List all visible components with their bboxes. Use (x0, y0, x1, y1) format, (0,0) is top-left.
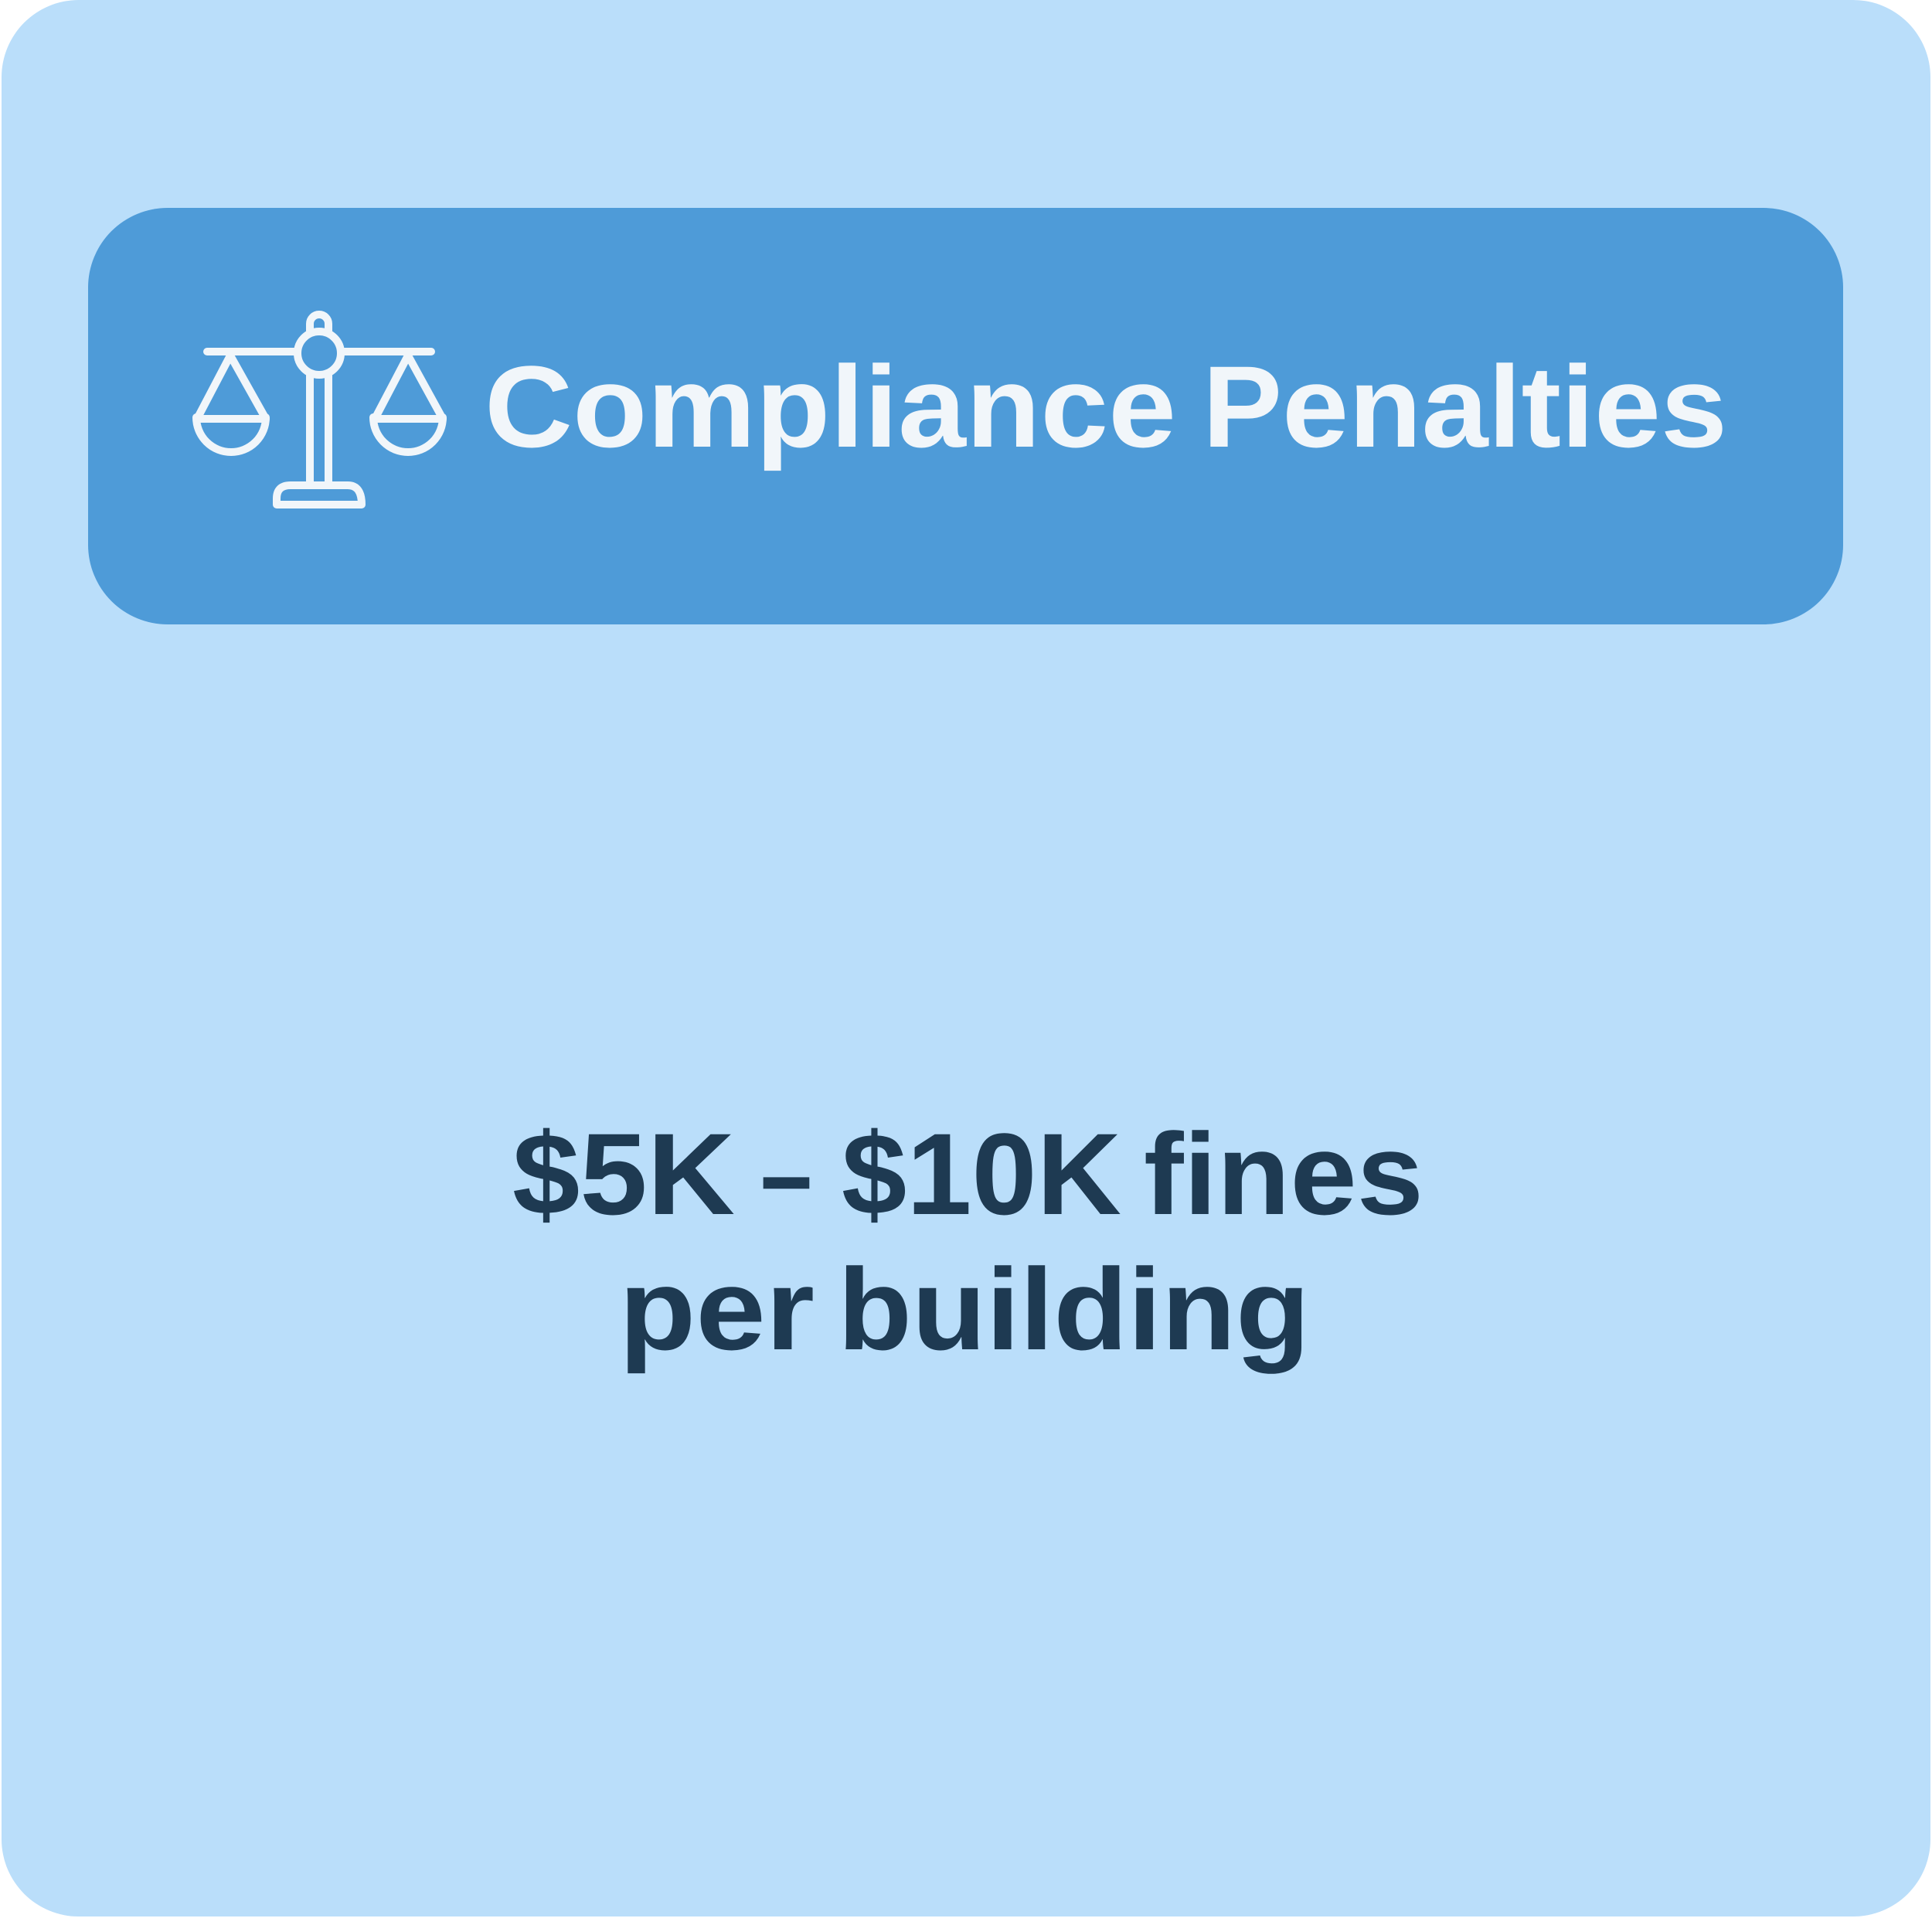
text block: fines per building: building (838, 1244, 1310, 1374)
text block: fines per building: fines (1144, 1109, 1423, 1239)
heading: Compliance Penalties (485, 342, 1727, 471)
text block: fines per building: per (619, 1244, 815, 1374)
heading: Compliance Penalties: Penalties (1202, 342, 1727, 471)
heading: Compliance Penalties: Compliance (485, 342, 1176, 471)
panel: header banner (88, 208, 1843, 624)
text block: fines per building: – (760, 1109, 812, 1239)
header background (88, 208, 1843, 624)
icon: balance scales (196, 315, 443, 505)
text block: fines per building: $10K (842, 1109, 1121, 1239)
text block: fines per building (512, 1109, 1423, 1374)
text block: fines per building: $5K (512, 1109, 735, 1239)
